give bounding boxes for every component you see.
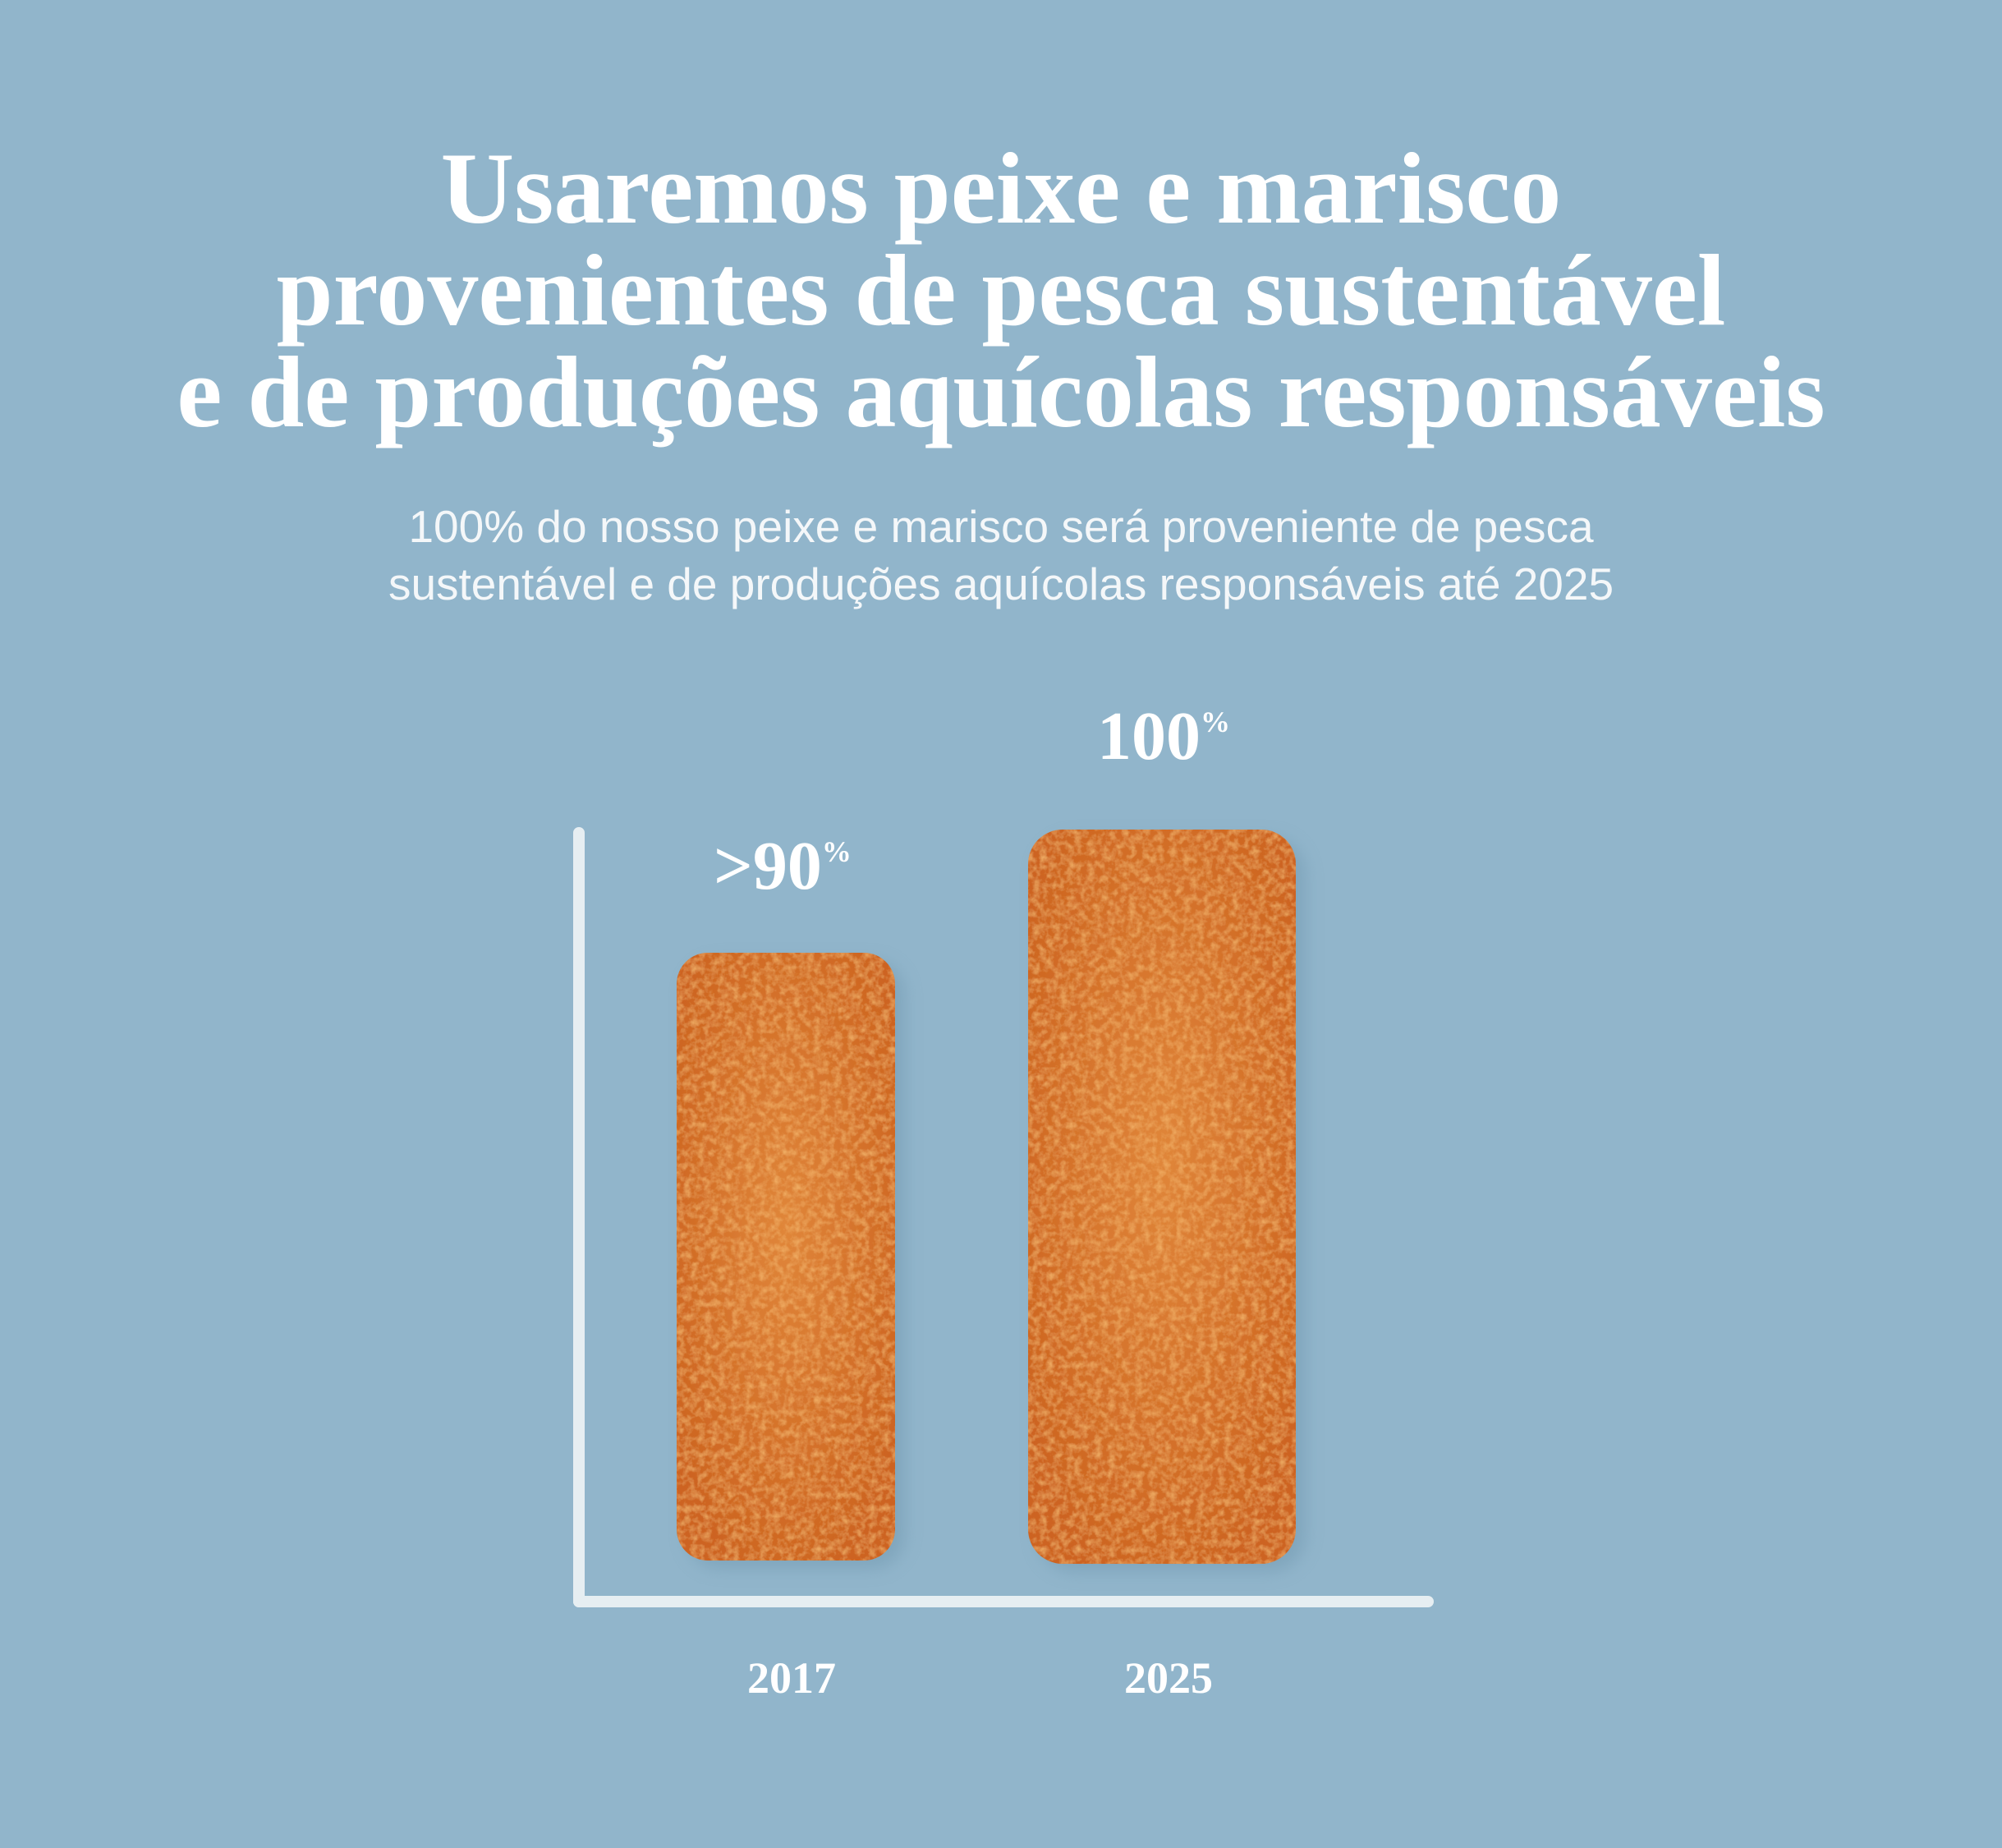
- subtitle: [388, 501, 1614, 609]
- label: 2025: 2025: [1124, 1653, 1213, 1703]
- subtitle: sustentável e de produções aquícolas responsáveis até 2025: [388, 559, 1614, 609]
- axes: [579, 833, 1428, 1602]
- label: >90%: >90%: [714, 828, 852, 904]
- title: e de produções aquícolas responsáveis: [177, 336, 1825, 448]
- bar: 2017 fish stick: [677, 953, 905, 1569]
- label: 100%: 100%: [1097, 698, 1230, 775]
- title: provenientes de pesca sustentável: [277, 234, 1725, 347]
- title: Usaremos peixe e marisco: [441, 132, 1561, 245]
- subtitle: 100% do nosso peixe e marisco será proveniente de pesca: [408, 501, 1594, 552]
- title: [177, 132, 1825, 448]
- bar: 2025 fish stick: [1028, 830, 1306, 1572]
- label: 2017: 2017: [747, 1653, 836, 1703]
